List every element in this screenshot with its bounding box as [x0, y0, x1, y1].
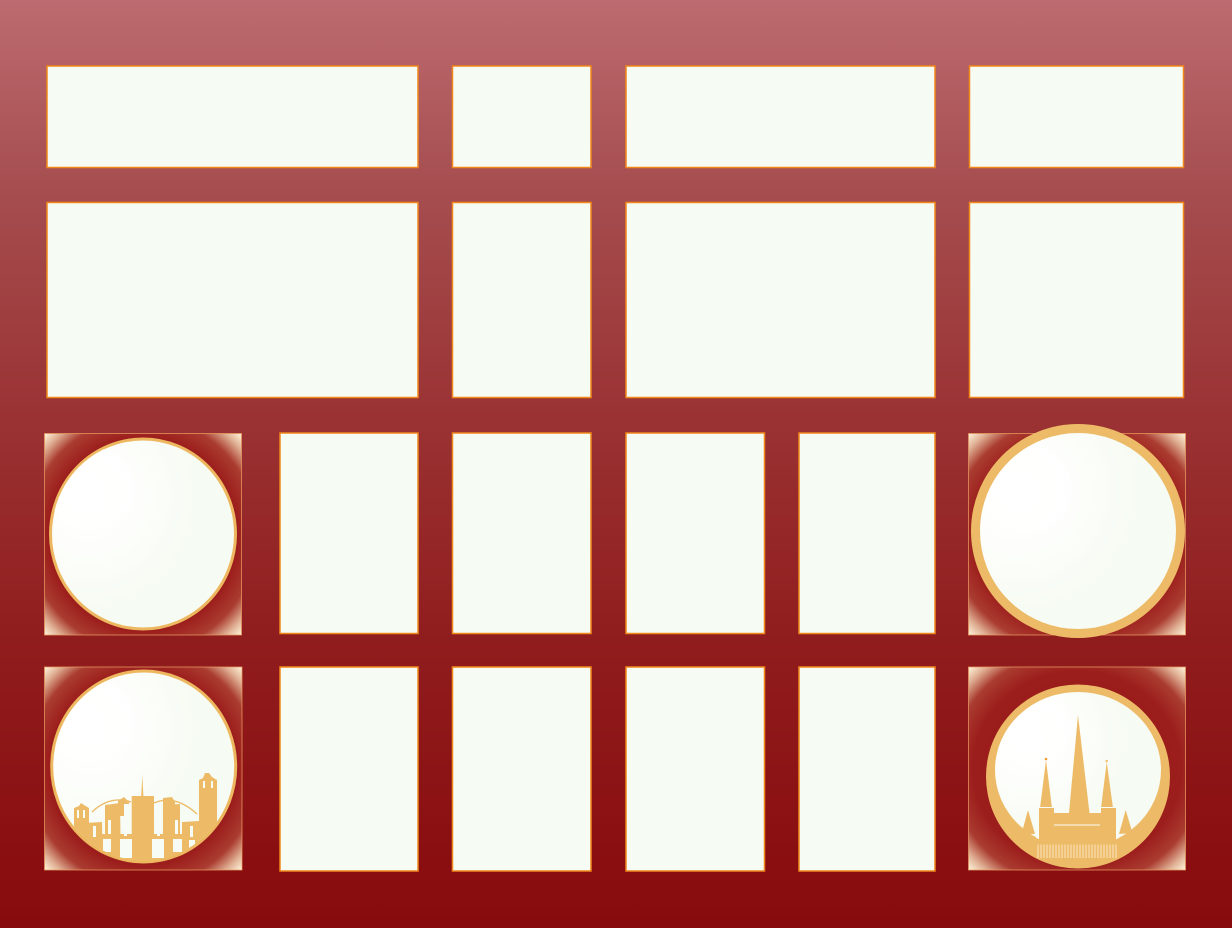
row 3 panels	[280, 433, 935, 634]
panel: row 1 column 3	[626, 66, 935, 168]
row 4 panels	[280, 667, 935, 871]
panel: row 4 column 4	[626, 667, 764, 871]
panel: row 3 column 4	[626, 433, 764, 634]
panel: row 2 column 3	[626, 202, 935, 398]
panel: row 1 column 2	[452, 66, 591, 168]
panel: row 2 column 1	[47, 202, 418, 398]
panel: row 3 column 5	[799, 433, 935, 634]
panel: row 3 column 3	[452, 433, 591, 634]
icon: city skyline	[74, 773, 217, 870]
icon: cathedral	[1022, 715, 1132, 860]
medallion: row 4 left with city skyline	[44, 667, 242, 870]
panel: row 3 column 2	[280, 433, 418, 634]
panel: row 1 column 4	[970, 66, 1184, 168]
medallion: row 3 right	[968, 428, 1186, 635]
medallion: row 3 left	[44, 434, 242, 635]
panel: row 1 column 1	[47, 66, 418, 168]
panel: row 4 column 3	[452, 667, 591, 871]
panel: row 2 column 4	[970, 202, 1184, 398]
panel: row 4 column 2	[280, 667, 418, 871]
medallion: row 4 right with cathedral	[968, 667, 1186, 870]
panel: row 2 column 2	[452, 202, 591, 398]
row 2 panels	[47, 202, 1184, 398]
columns	[1038, 844, 1116, 858]
panel: row 4 column 5	[799, 667, 935, 871]
row 1 panels	[47, 66, 1184, 168]
windows	[77, 781, 213, 858]
